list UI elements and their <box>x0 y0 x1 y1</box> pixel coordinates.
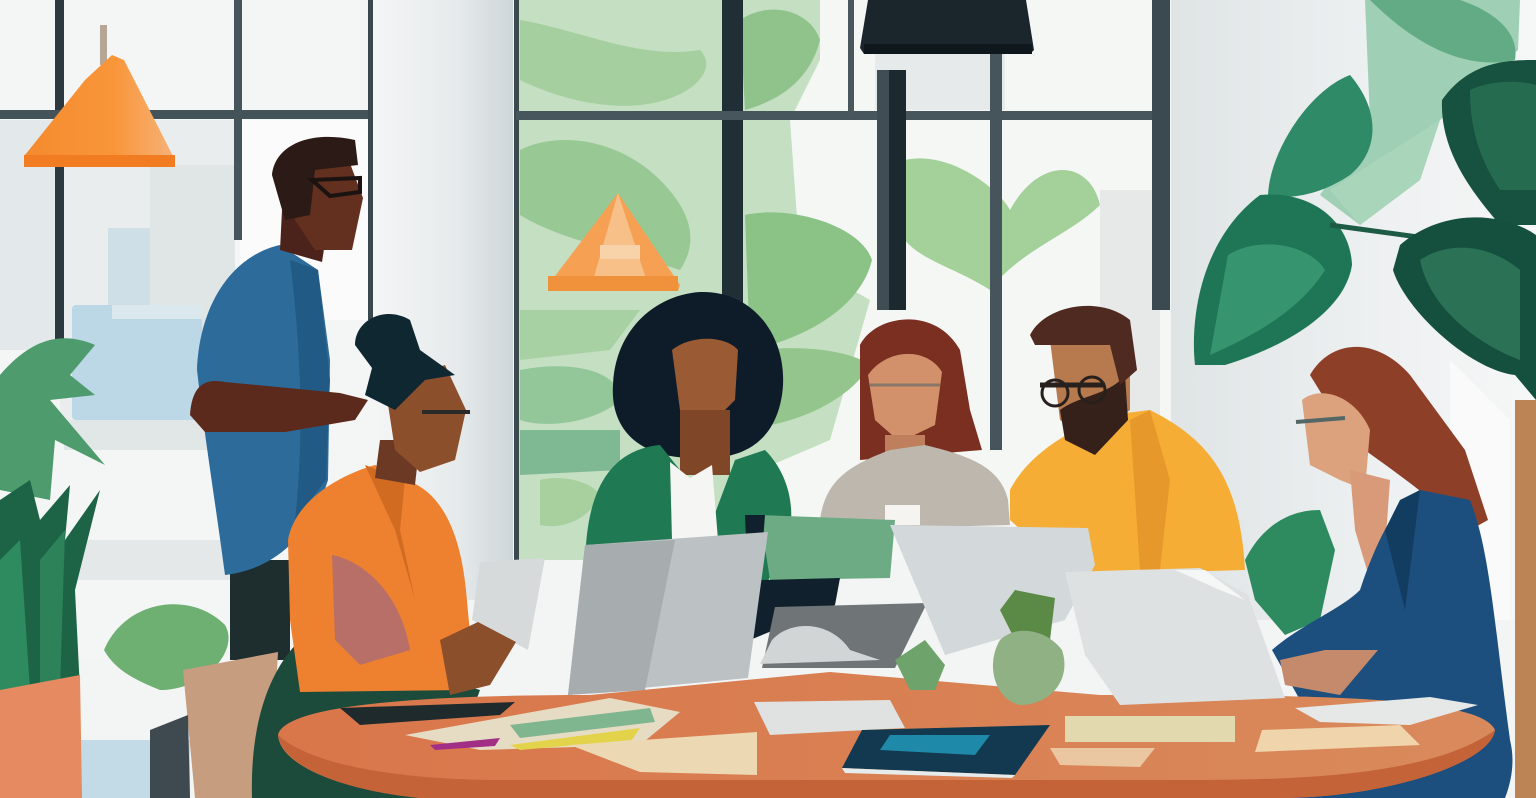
terracotta pot <box>0 675 82 798</box>
small dark laptop <box>760 603 927 668</box>
woman with long hair in blue <box>1260 347 1512 798</box>
center window <box>514 0 1170 560</box>
orange pendant lamp left <box>24 25 175 167</box>
potted succulent <box>895 590 1064 705</box>
right side papers <box>1050 697 1478 767</box>
dark laptop screen behind <box>745 515 840 640</box>
woman with afro <box>586 292 791 600</box>
orange pendant lamp center <box>548 193 680 291</box>
laptop center left <box>568 532 768 695</box>
woman in orange <box>252 314 480 798</box>
standing man <box>190 137 368 660</box>
shoe <box>150 715 190 798</box>
floor plant leaf <box>104 604 229 690</box>
plant left <box>0 338 105 690</box>
hand of woman in orange <box>440 622 516 695</box>
laptop center right <box>890 525 1095 655</box>
papers and markers on table <box>340 698 757 775</box>
column <box>373 0 513 600</box>
woman in grey with red hair <box>820 319 1010 530</box>
man with beard in yellow <box>1010 306 1245 575</box>
black lamp top <box>860 0 1034 54</box>
right wall <box>1171 0 1536 620</box>
left window <box>0 0 373 798</box>
chair left <box>183 652 278 798</box>
laptop right <box>1065 568 1285 705</box>
hand of woman in blue <box>1280 650 1378 695</box>
tablet held by woman in orange <box>472 558 545 650</box>
large plant upper right <box>1194 0 1536 798</box>
round table <box>278 672 1495 798</box>
notebook <box>754 700 905 735</box>
green folder center <box>760 515 895 580</box>
small fern by right woman <box>1245 510 1335 635</box>
blue book <box>842 725 1050 778</box>
